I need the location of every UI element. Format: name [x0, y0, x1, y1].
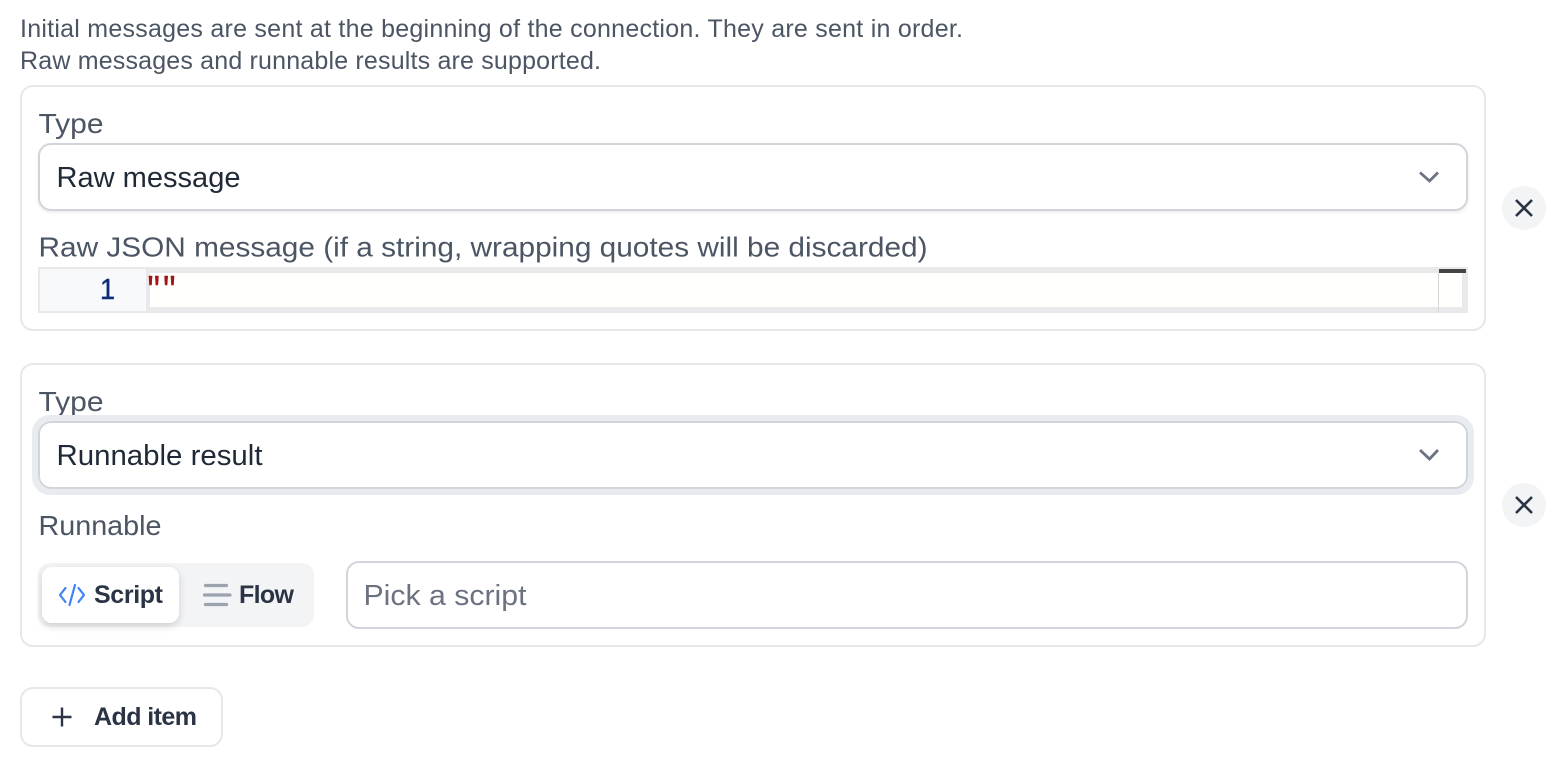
select: runnable result	[35, 418, 1471, 492]
panel: runnable result item	[21, 364, 1485, 646]
select: raw message: Raw message	[56, 162, 240, 194]
type label: Type	[38, 108, 104, 139]
icon: flow lines	[204, 586, 230, 604]
intro text	[20, 15, 963, 75]
type label: Type	[38, 386, 104, 417]
line number: 1	[100, 274, 115, 306]
runnable label: Runnable	[38, 510, 162, 541]
add item button	[21, 688, 222, 746]
select: raw message	[39, 144, 1467, 210]
panel: raw message item	[21, 86, 1485, 330]
raw JSON label: Raw JSON message (if a string, wrapping quotes will be discarded)	[38, 232, 928, 262]
select: runnable result: Runnable result	[56, 440, 263, 472]
script picker input: Pick a script	[364, 580, 527, 612]
icon: code	[60, 585, 84, 605]
flow label: Flow	[239, 581, 295, 609]
remove button 2	[1502, 483, 1546, 527]
intro text: Raw messages and runnable results are supported.	[20, 47, 601, 75]
intro text: Initial messages are sent at the beginning of the connection. They are sent in order.	[20, 15, 963, 43]
code editor	[38, 267, 1468, 313]
remove button 1	[1502, 186, 1546, 230]
code: empty string: ""	[145, 273, 178, 306]
script label: Script	[94, 581, 164, 609]
add item button: Add item	[94, 703, 197, 731]
script picker input	[347, 562, 1467, 628]
toggle: script or flow	[38, 563, 314, 627]
